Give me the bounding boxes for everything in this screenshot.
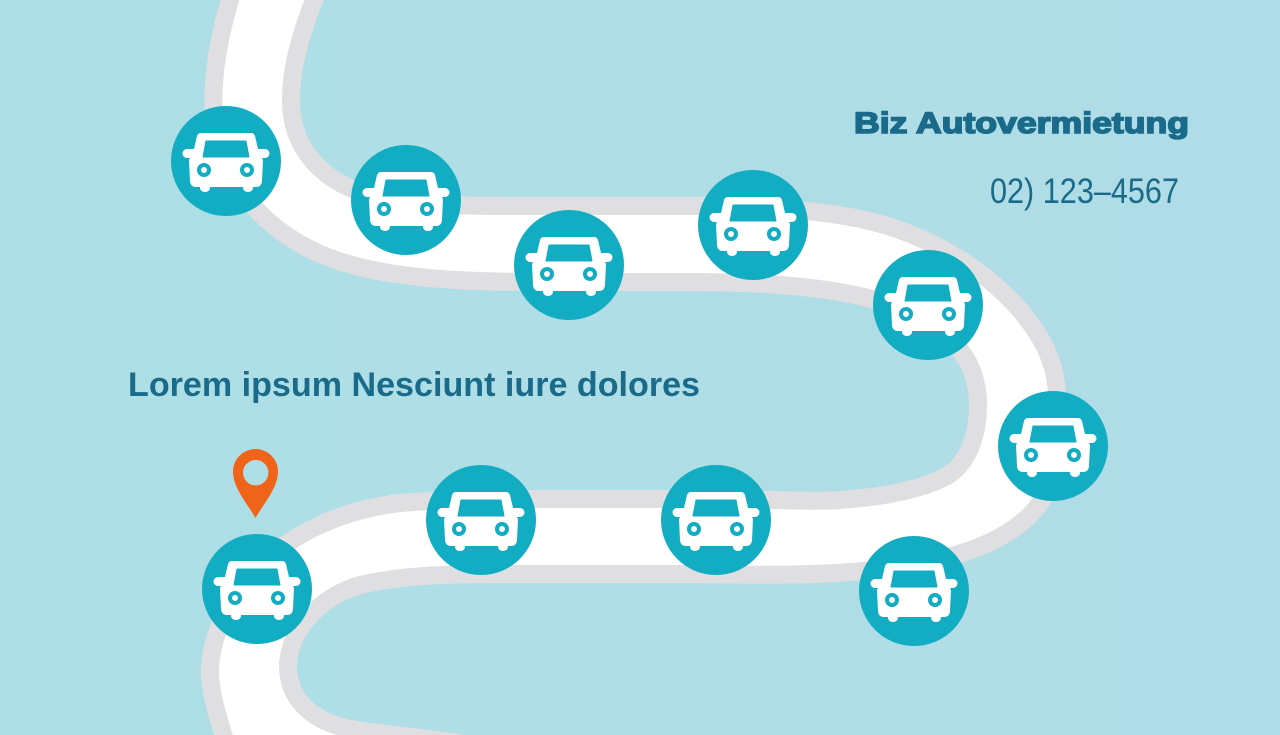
icon: car stop 1 [171,106,281,216]
icon: car stop 9 [426,465,536,575]
icon: car stop 7 [859,536,969,646]
company name: Biz Autovermietung [854,107,1189,140]
winding road [210,0,1057,735]
icon: car stop 8 [661,465,771,575]
icon: car stop 6 [998,391,1108,501]
phone number: 02) 123–4567 [990,172,1179,211]
icon: car stop 5 [873,250,983,360]
route heading: Lorem ipsum Nesciunt iure dolores [128,366,700,404]
icon: car stop 4 [698,170,808,280]
icon: car stop 2 [351,145,461,255]
icon: location pin [233,449,278,518]
icon: car stop 3 [514,210,624,320]
icon: car stop 10 [202,534,312,644]
